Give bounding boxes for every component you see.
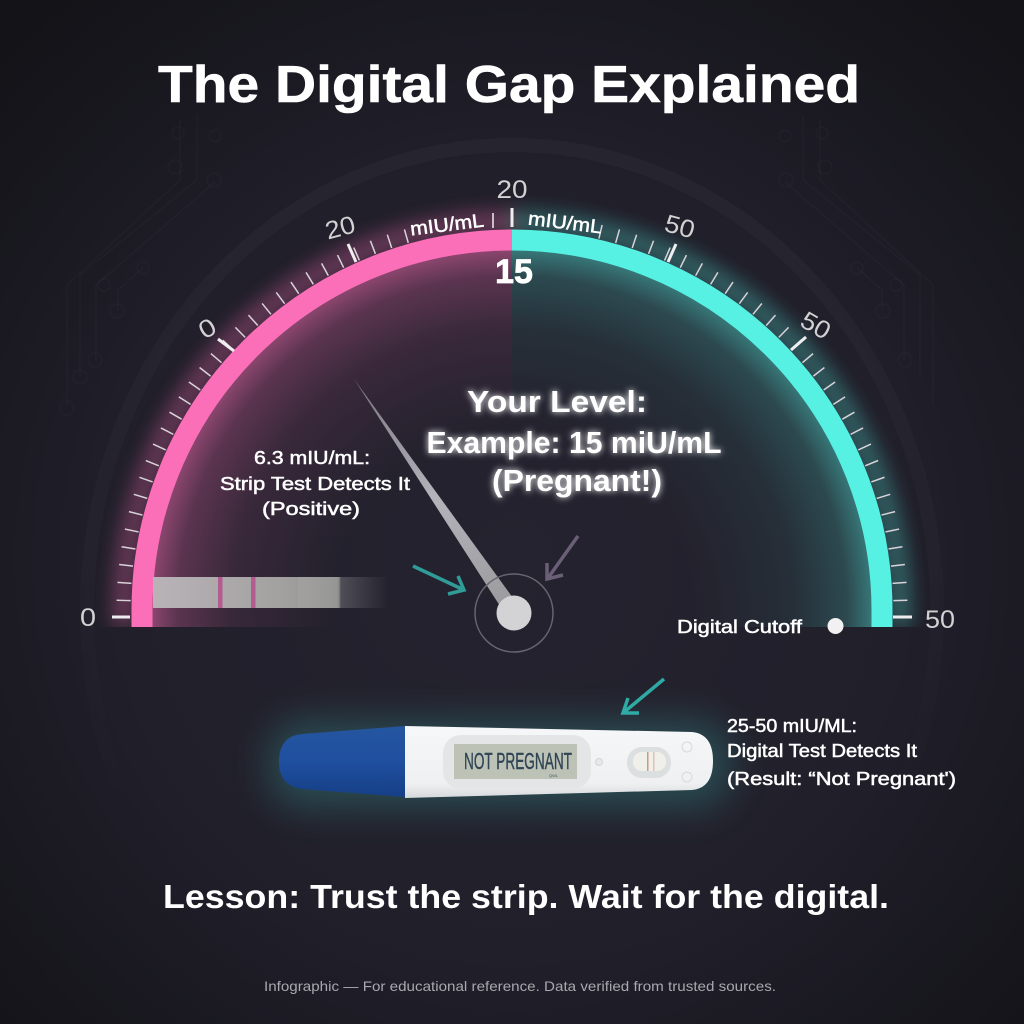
teal arc (512, 240, 882, 627)
scale labels: 0 (80, 604, 96, 632)
callout: strip test: 6.3 mIU/mL: (254, 448, 370, 468)
callout: your level: (Pregnant!) (492, 463, 662, 498)
white body (405, 726, 713, 798)
callout: your level: Example: 15 miU/mL (426, 425, 722, 460)
gauge interior glow (152, 250, 872, 627)
callout: strip test (220, 448, 410, 519)
LCD screen (454, 744, 577, 779)
scale labels: 50 (662, 210, 698, 244)
callout: strip test: Strip Test Detects It (220, 474, 410, 494)
unit labels (409, 209, 603, 240)
callout: digital test: Digital Test Detects It (727, 741, 917, 761)
scale labels: 20 (496, 176, 528, 204)
gauge (80, 176, 955, 634)
unit labels: mIU/mL (409, 211, 485, 240)
minor tick marks (124, 231, 900, 601)
background circuit pattern and rings (60, 115, 937, 1024)
test strip (153, 577, 388, 608)
major tick marks (112, 208, 912, 617)
centre value 15: 15 (495, 253, 533, 291)
lesson: Lesson: Trust the strip. Wait for the digital. (163, 878, 889, 915)
pink arc (142, 240, 512, 627)
callout: digital test (727, 716, 956, 789)
needle and hub (354, 379, 553, 652)
arrow: teal to digital test (623, 679, 664, 713)
scale labels: 0 (194, 313, 221, 345)
scale labels: 50 (796, 306, 835, 345)
digital cutoff marker (677, 617, 844, 637)
result window (627, 747, 671, 778)
digital cutoff marker: Digital Cutoff (677, 617, 803, 637)
scale labels: 50 (925, 606, 955, 634)
unit labels: mIU/mL (527, 209, 603, 238)
callout: your level: Your Level: (467, 384, 647, 419)
title: The Digital Gap Explained (158, 56, 860, 114)
blue cap (279, 726, 405, 797)
display bezel (443, 735, 591, 789)
digital test device (270, 722, 730, 806)
gauge outer glow (124, 222, 900, 627)
callout: strip test: (Positive) (262, 499, 360, 519)
arrow: purple to needle (547, 536, 578, 579)
scale labels: 20 (322, 211, 358, 245)
LCD text: NOT PREGNANT (464, 748, 572, 774)
LCD small mark: QWL (549, 773, 559, 778)
footer: Infographic — For educational reference. Data verified from trusted sources. (264, 978, 776, 994)
arrow: teal to needle (413, 566, 464, 594)
scale labels (80, 176, 955, 634)
callout: your level (426, 384, 722, 498)
callout: digital test: 25-50 mIU/ML: (727, 716, 857, 736)
callout: digital test: (Result: “Not Pregnant') (727, 769, 956, 789)
